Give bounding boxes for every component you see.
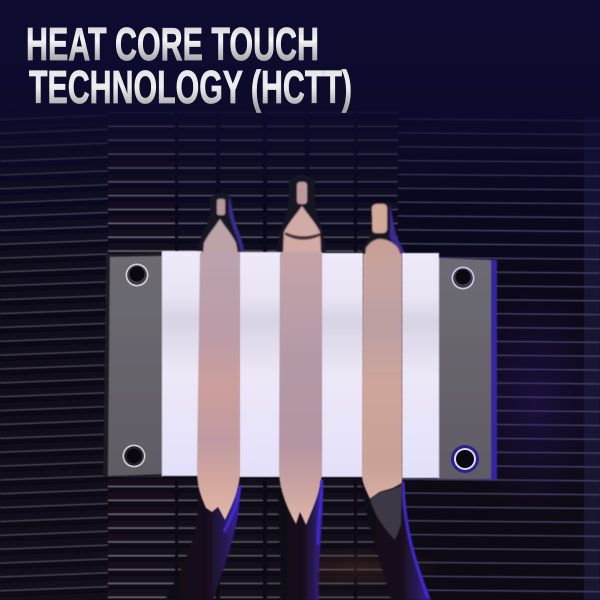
hole: top left xyxy=(126,264,148,286)
aluminium strip 4 xyxy=(402,253,439,478)
purple glow on fins xyxy=(465,280,600,520)
contact block xyxy=(103,251,497,480)
heat pipe: left neck xyxy=(197,192,245,254)
blue highlight on pipe edges xyxy=(224,480,428,598)
copper flat: middle pipe xyxy=(279,252,322,525)
hole: top right xyxy=(452,266,474,290)
hole: bottom left xyxy=(122,444,146,468)
hole: bottom right xyxy=(451,445,479,473)
right mounting plate xyxy=(438,258,497,480)
title xyxy=(26,18,352,113)
title line 1: HEAT CORE TOUCH xyxy=(26,18,319,70)
copper flat: left pipe xyxy=(197,252,240,520)
heat pipe: right neck xyxy=(360,202,406,256)
tube: middle bottom xyxy=(278,490,323,600)
left mounting plate xyxy=(103,252,164,478)
tube: left bottom xyxy=(165,490,240,600)
aluminium strip 1 xyxy=(162,251,202,476)
mounting holes xyxy=(122,264,479,473)
copper flat: right pipe xyxy=(362,254,402,499)
title line 2: TECHNOLOGY (HCTT) xyxy=(29,61,352,113)
warm reflection on fins xyxy=(270,546,440,590)
aluminium strip 2 xyxy=(239,252,281,477)
heat pipe: middle neck xyxy=(277,175,326,254)
grey solder patch on right pipe xyxy=(370,485,402,540)
aluminium strip 3 xyxy=(321,253,363,477)
tube: right bottom xyxy=(362,480,431,600)
